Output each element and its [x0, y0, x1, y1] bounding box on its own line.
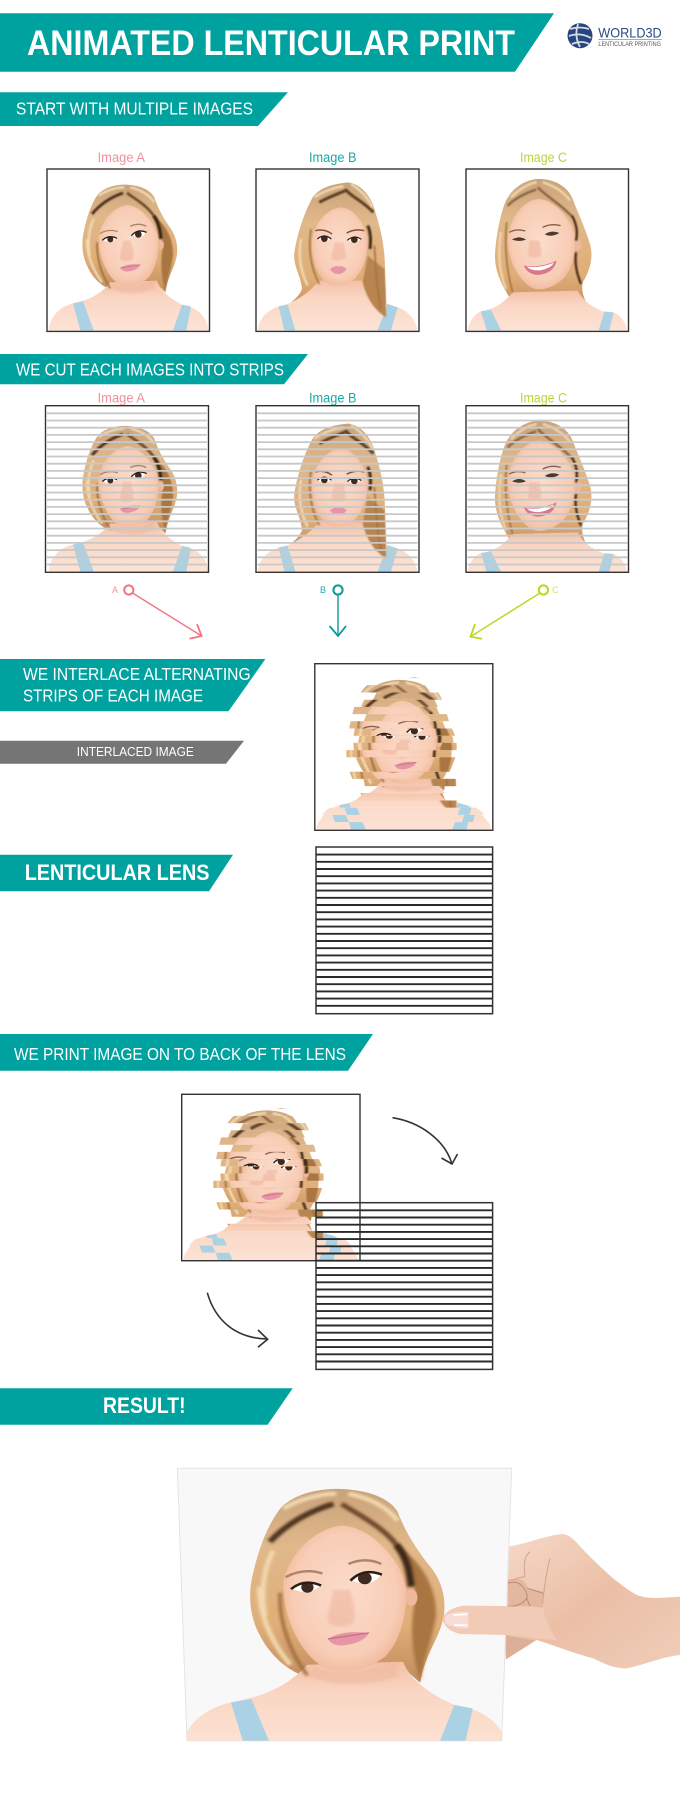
- arrow: A: A: [112, 585, 118, 595]
- label: Image B: Image B: [309, 150, 356, 165]
- lens over photo: [316, 1203, 493, 1369]
- heading: interlace: WE INTERLACE ALTERNATING: [23, 664, 251, 684]
- interlaced photo: [315, 664, 493, 830]
- interlaced photo over lens: [182, 1094, 360, 1261]
- logo: World3D: [568, 23, 662, 48]
- lenticular lens sheet: [316, 847, 493, 1014]
- tag: interlaced image: [0, 741, 244, 764]
- heading: lenticular lens: LENTICULAR LENS: [25, 860, 210, 885]
- arrow: B: [320, 585, 346, 636]
- tag: interlaced image: INTERLACED IMAGE: [77, 744, 194, 759]
- arrow: B: B: [320, 585, 326, 595]
- logo: World3D: LENTICULAR PRINTING: [598, 42, 661, 48]
- arrow: C: C: [552, 585, 559, 595]
- photo: image C: [466, 169, 628, 331]
- heading: start with multiple images: START WITH MULTIPLE IMAGES: [16, 98, 253, 118]
- arrow: C: [470, 585, 559, 639]
- heading: interlace: STRIPS OF EACH IMAGE: [23, 685, 203, 705]
- heading: start with multiple images: [0, 92, 288, 126]
- heading: print on back of lens: [0, 1034, 373, 1071]
- strips photo: image B: [256, 406, 419, 572]
- strips photo: image A: [46, 406, 209, 572]
- strips photo: image C: [466, 406, 628, 572]
- heading: lenticular lens: [0, 855, 233, 891]
- heading: cut into strips: [0, 354, 308, 384]
- result: lenticular print held up: [177, 1468, 512, 1751]
- result: thumb over print: [443, 1606, 557, 1640]
- curved arrow: bottom: [207, 1293, 268, 1347]
- result: hand behind print: [505, 1534, 680, 1668]
- heading: result: [0, 1388, 293, 1425]
- heading: cut into strips: WE CUT EACH IMAGES INTO STRIPS: [16, 360, 284, 380]
- label: Image A: Image A: [98, 150, 145, 165]
- label: strip Image A: Image A: [98, 391, 145, 406]
- arrow: A: [112, 585, 202, 639]
- title banner: [0, 13, 554, 72]
- label: Image C: Image C: [520, 150, 567, 165]
- curved arrow: top: [392, 1118, 458, 1164]
- label: strip Image C: Image C: [520, 391, 567, 406]
- heading: result: RESULT!: [103, 1393, 186, 1418]
- label: strip Image B: Image B: [309, 391, 356, 406]
- title banner: ANIMATED LENTICULAR PRINT: [27, 24, 515, 63]
- heading: print on back of lens: WE PRINT IMAGE ON TO BACK OF THE LENS: [14, 1044, 346, 1064]
- logo: World3D: WORLD3D: [598, 26, 662, 41]
- heading: interlace: [0, 659, 265, 711]
- photo: image A: [47, 169, 210, 331]
- photo: image B: [256, 169, 419, 331]
